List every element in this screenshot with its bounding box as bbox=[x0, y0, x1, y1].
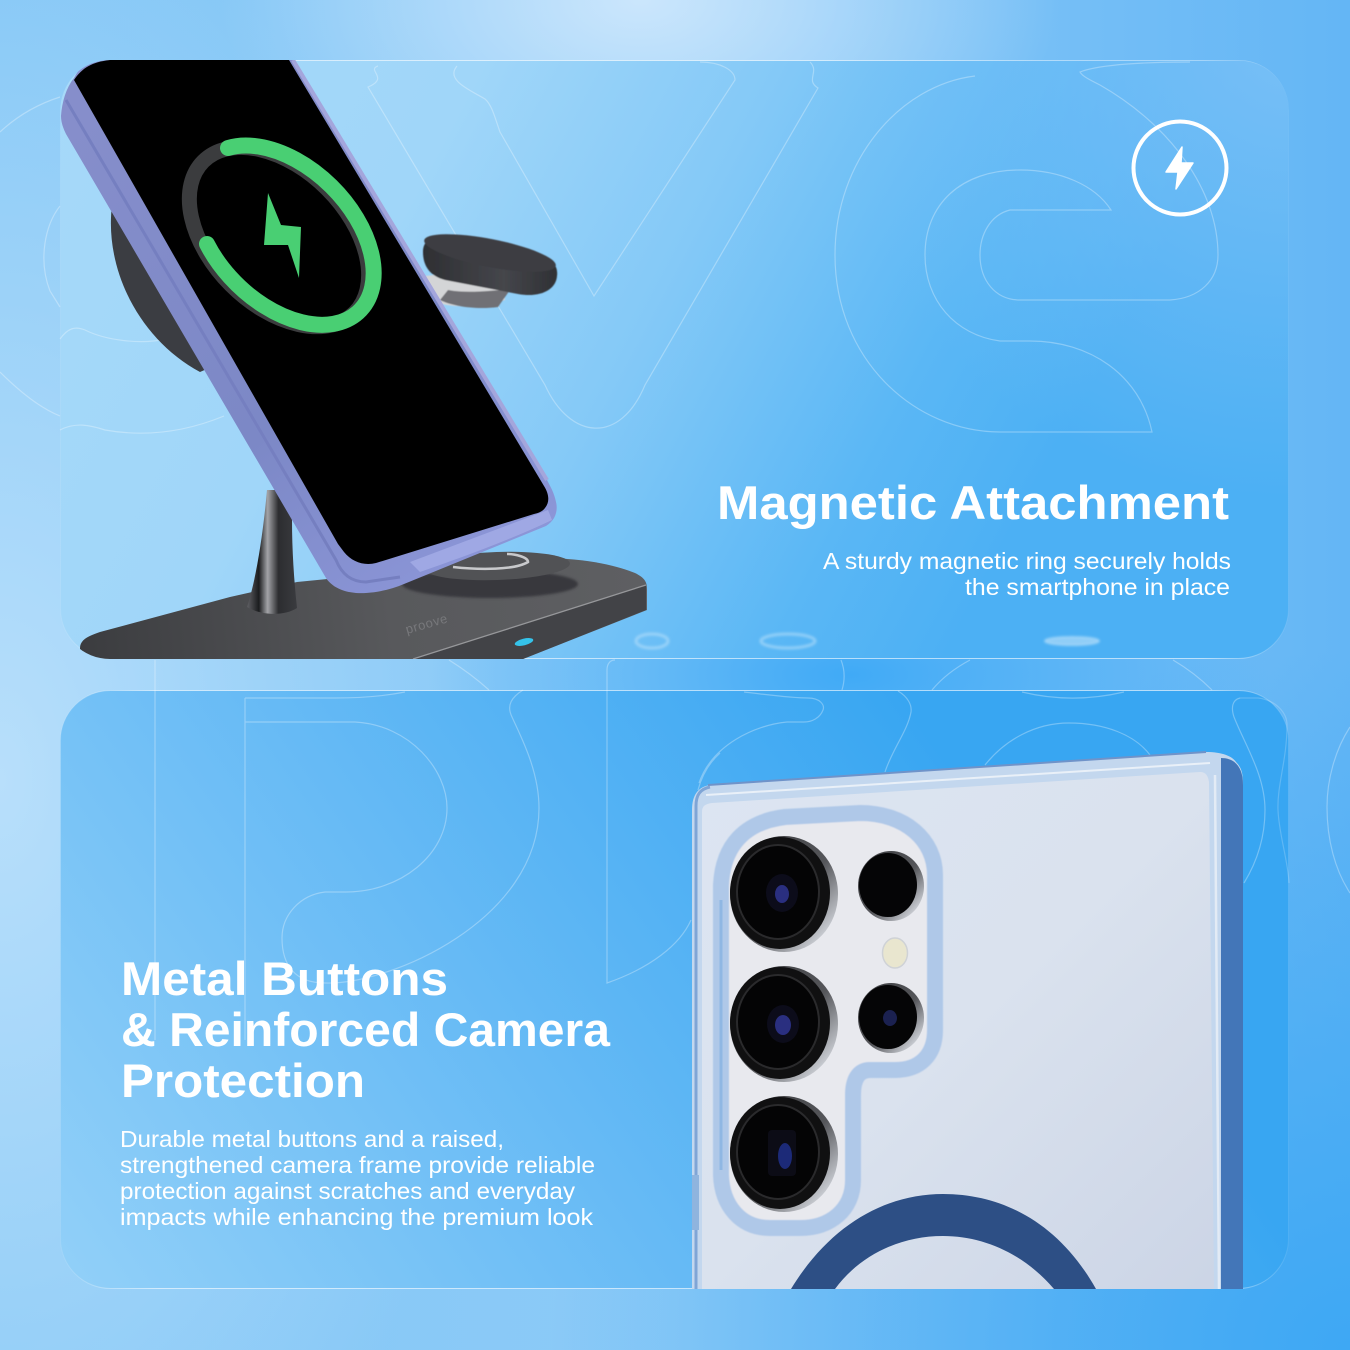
stand stem bbox=[247, 490, 297, 614]
background outline lettering bbox=[0, 62, 1350, 1040]
side button bbox=[692, 1175, 699, 1230]
text: metal buttons description: strengthened camera frame provide reliable bbox=[120, 1152, 595, 1178]
magnetic ring bbox=[791, 1194, 1096, 1289]
reflections under stand bbox=[636, 634, 1099, 648]
lens 5 bbox=[858, 983, 924, 1053]
camera island bbox=[721, 813, 935, 1228]
text: metal buttons description: impacts while enhancing the premium look bbox=[120, 1204, 594, 1230]
heading: metal buttons: & Reinforced Camera bbox=[121, 1003, 611, 1056]
lightning bolt bbox=[264, 193, 301, 278]
heading: metal buttons: Protection bbox=[121, 1054, 365, 1107]
side band bbox=[1221, 758, 1243, 1289]
text: metal buttons description bbox=[120, 1126, 595, 1230]
lens 2 bbox=[730, 966, 838, 1082]
icon: charging bolt bbox=[1134, 122, 1226, 214]
text: magnetic attachment description bbox=[823, 548, 1231, 600]
phone screen bbox=[74, 60, 548, 564]
text: magnetic attachment description: the smartphone in place bbox=[965, 574, 1230, 600]
flash bbox=[882, 938, 908, 968]
back plate bbox=[702, 772, 1214, 1289]
lens 3 bbox=[730, 1096, 838, 1212]
product: phone case back bbox=[692, 752, 1243, 1289]
watch charger bbox=[422, 226, 558, 308]
text: metal buttons description: Durable metal buttons and a raised, bbox=[120, 1126, 504, 1152]
base plate bbox=[80, 549, 647, 659]
magnetic disc behind phone bbox=[110, 211, 204, 372]
product: wireless charging stand with phone bbox=[61, 60, 647, 659]
case frame bbox=[692, 752, 1243, 1289]
phone case bbox=[61, 60, 557, 593]
status LED bbox=[514, 638, 534, 646]
panel: magnetic attachment bbox=[60, 60, 1288, 658]
heading: metal buttons: Metal Buttons bbox=[121, 952, 448, 1005]
panel: metal buttons bbox=[60, 690, 1288, 1288]
heading: metal buttons bbox=[121, 952, 611, 1107]
heading: magnetic attachment: Magnetic Attachment bbox=[717, 476, 1229, 529]
charging puck bbox=[402, 570, 578, 598]
text: metal buttons description: protection against scratches and everyday bbox=[120, 1178, 576, 1204]
lens 1 bbox=[730, 836, 838, 952]
charging ring bbox=[182, 138, 382, 334]
lens 4 bbox=[858, 851, 924, 921]
text: magnetic attachment description: A sturdy magnetic ring securely holds bbox=[823, 548, 1231, 574]
brand: proove bbox=[404, 611, 450, 637]
